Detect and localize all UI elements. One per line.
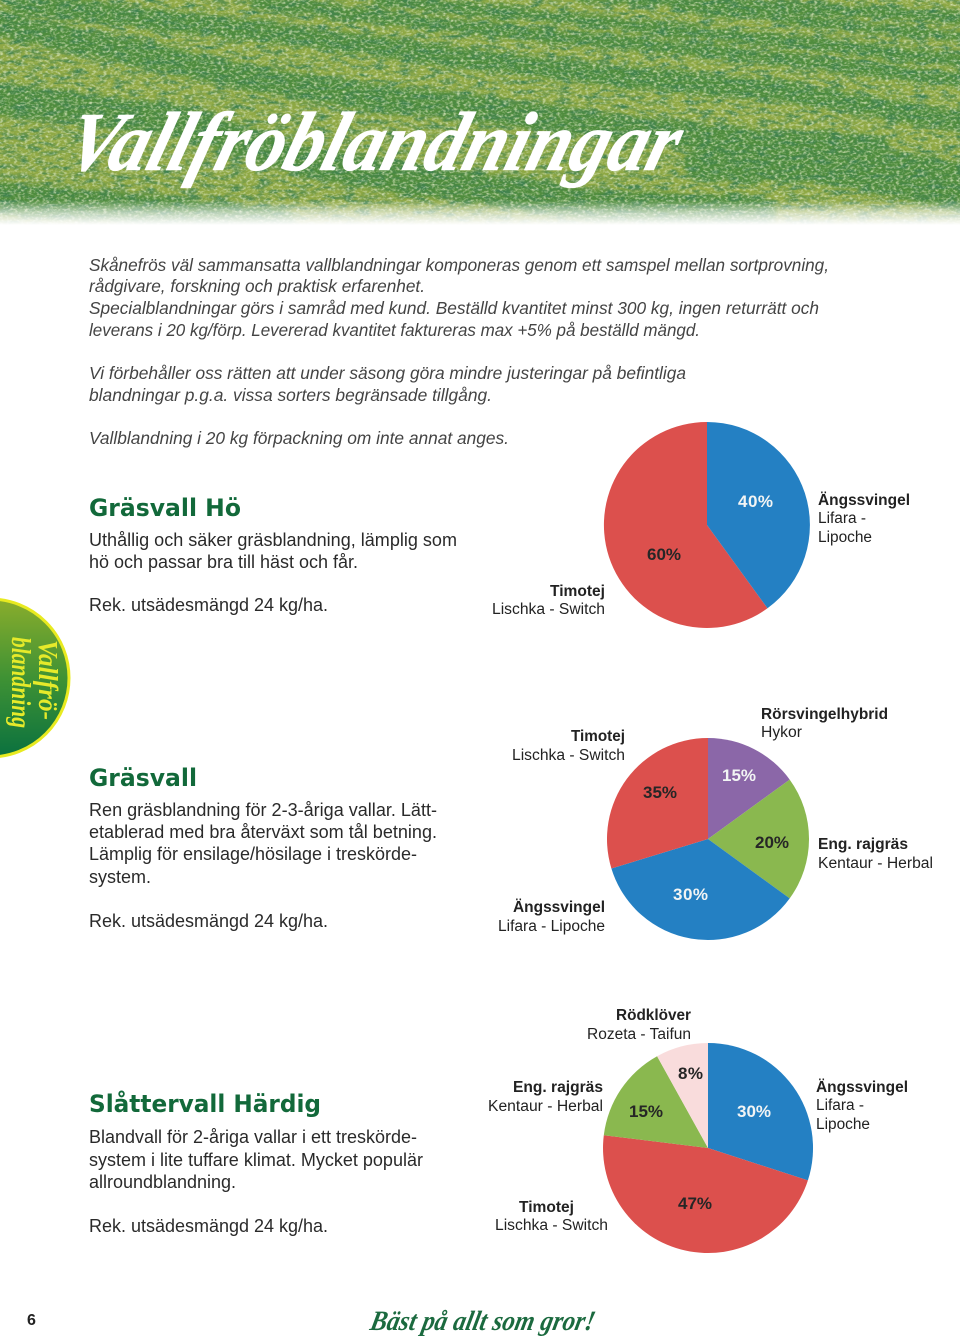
pie chart: Slåttervall Härdig: Lifara -: [816, 1097, 864, 1114]
footer slogan: Bäst på allt som gror!: [367, 1306, 598, 1337]
panel: Gräsvall text: system.: [89, 867, 151, 887]
pie chart: Gräsvall: Timotej: [571, 728, 625, 745]
intro text: blandningar p.g.a. vissa sorters begränsade tillgång.: [89, 385, 492, 405]
pie chart: Gräsvall: 30%: [673, 885, 708, 904]
panel: Slåttervall Härdig text: allroundblandning.: [89, 1172, 236, 1192]
pie chart: Gräsvall: 35%: [643, 783, 677, 802]
pie chart: Slåttervall Härdig: 47%: [678, 1194, 712, 1213]
pie chart: Slåttervall Härdig: Lipoche: [816, 1116, 870, 1133]
side tab: Vallfrö-blandning: blandning: [6, 637, 36, 728]
pie chart: Slåttervall Härdig: 15%: [629, 1102, 663, 1121]
pie chart: Slåttervall Härdig: 8%: [678, 1064, 703, 1083]
intro text: rådgivare, forskning och praktisk erfarenhet.: [89, 276, 425, 296]
side tab: Vallfrö-blandning: Vallfrö-: [33, 640, 63, 720]
pie chart: Gräsvall: Eng. rajgräs: [818, 836, 908, 853]
panel: Gräsvall Hö text: hö och passar bra till häst och får.: [89, 552, 358, 572]
panel: Gräsvall text: Ren gräsblandning för 2-3-åriga vallar. Lätt-: [89, 800, 437, 820]
pie chart: Gräsvall: Lischka - Switch: [512, 747, 625, 764]
panel: Gräsvall Hö text: Uthållig och säker gräsblandning, lämplig som: [89, 530, 457, 550]
pie chart: Gräsvall Hö: 40%: [738, 492, 773, 511]
pie chart: Gräsvall Hö: Lischka - Switch: [492, 601, 605, 618]
pie chart: Slåttervall Härdig: Kentaur - Herbal: [488, 1098, 603, 1115]
panel: Gräsvall text: etablerad med bra återväxt som tål betning.: [89, 822, 437, 842]
panel: Gräsvall text: [89, 764, 437, 931]
panel: Gräsvall text: Gräsvall: [89, 764, 197, 792]
panel: Slåttervall Härdig text: system i lite tuffare klimat. Mycket populär: [89, 1150, 423, 1170]
pie chart: Gräsvall: Hykor: [761, 724, 802, 741]
intro text: [89, 255, 829, 448]
side tab: Vallfrö-blandning: [0, 599, 69, 757]
intro text: Vallblandning i 20 kg förpackning om inte annat anges.: [89, 428, 509, 448]
intro text: leverans i 20 kg/förp. Levererad kvantitet faktureras max +5% på beställd mängd.: [89, 320, 700, 340]
photo: mown grass field header: [0, 0, 960, 229]
panel: Gräsvall Hö text: Rek. utsädesmängd 24 kg/ha.: [89, 595, 328, 615]
panel: Gräsvall Hö text: [89, 494, 457, 615]
pie chart: Gräsvall: Lifara - Lipoche: [498, 918, 605, 935]
panel: Slåttervall Härdig text: Slåttervall Härdig: [89, 1089, 321, 1118]
pie chart: Slåttervall Härdig: Timotej: [519, 1199, 574, 1216]
pie chart: Gräsvall: Rörsvingelhybrid: [761, 706, 888, 723]
pie chart: Slåttervall Härdig: [488, 1007, 908, 1253]
panel: Slåttervall Härdig text: Blandvall för 2-åriga vallar i ett treskörde-: [89, 1127, 417, 1147]
pie chart: Slåttervall Härdig: Rozeta - Taifun: [587, 1026, 691, 1043]
panel: Slåttervall Härdig text: [89, 1089, 423, 1236]
intro text: Skånefrös väl sammansatta vallblandningar komponeras genom ett samspel mellan sortprovning,: [89, 255, 829, 275]
pie chart: Slåttervall Härdig: Eng. rajgräs: [513, 1079, 603, 1096]
pie chart: Gräsvall Hö: Ängssvingel: [818, 492, 910, 509]
page number: 6: [27, 1312, 36, 1329]
panel: Gräsvall Hö text: Gräsvall Hö: [89, 494, 241, 522]
pie chart: Gräsvall: Ängssvingel: [513, 899, 605, 916]
pie chart: Slåttervall Härdig: Lischka - Switch: [495, 1217, 608, 1234]
pie chart: Gräsvall Hö: Lipoche: [818, 529, 872, 546]
pie chart: Slåttervall Härdig: 30%: [737, 1102, 771, 1121]
pie chart: Gräsvall: [498, 706, 933, 940]
intro text: Vi förbehåller oss rätten att under säsong göra mindre justeringar på befintliga: [89, 363, 686, 383]
pie chart: Gräsvall: Kentaur - Herbal: [818, 855, 933, 872]
pie chart: Gräsvall Hö: Timotej: [550, 583, 605, 600]
pie chart: Gräsvall Hö: Lifara -: [818, 510, 866, 527]
pie chart: Slåttervall Härdig: Ängssvingel: [816, 1079, 908, 1096]
intro text: Specialblandningar görs i samråd med kund. Beställd kvantitet minst 300 kg, ingen returrätt och: [89, 298, 819, 318]
title: Vallfröblandningar: [57, 96, 694, 189]
panel: Gräsvall text: Lämplig för ensilage/hösilage i treskörde-: [89, 844, 417, 864]
pie chart: Gräsvall Hö: 60%: [647, 545, 681, 564]
pie chart: Gräsvall: 20%: [755, 833, 789, 852]
pie chart: Slåttervall Härdig: Rödklöver: [616, 1007, 691, 1024]
pie chart: Gräsvall: 15%: [722, 766, 756, 785]
pie chart: Gräsvall Hö: [492, 422, 910, 628]
panel: Gräsvall text: Rek. utsädesmängd 24 kg/ha.: [89, 911, 328, 931]
panel: Slåttervall Härdig text: Rek. utsädesmängd 24 kg/ha.: [89, 1216, 328, 1236]
